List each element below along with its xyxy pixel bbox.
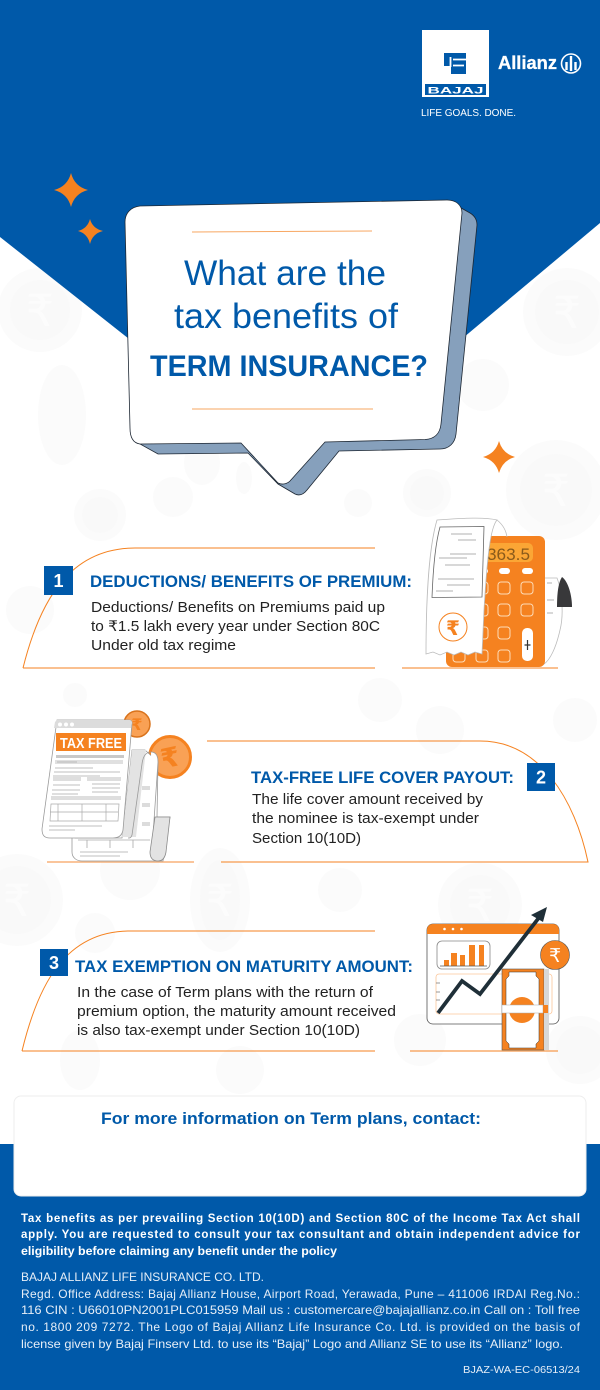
background rupee coin watermarks: ₹ (542, 467, 570, 516)
contact heading: For more information on Term plans, contact: (101, 1109, 481, 1128)
title: TERM INSURANCE? (150, 350, 428, 383)
company legal text: Regd. Office Address: Bajaj Allianz House, Airport Road, Yerawada, Pune – 411006 IRDAI Reg.No.: (21, 1287, 580, 1301)
body text: Under old tax regime (91, 638, 236, 654)
number badge 1: 1 (53, 571, 64, 591)
icon: small sparkle (78, 219, 103, 244)
icon: growth chart with banknote (427, 907, 570, 1050)
title: What are the (184, 254, 386, 293)
background rupee coin watermarks: ₹ (26, 287, 54, 336)
frame line (207, 741, 588, 862)
panel: section 3 tax exemption (22, 907, 570, 1051)
icon: calculator and receipt (426, 518, 572, 667)
body text: In the case of Term plans with the return of (77, 985, 374, 1001)
company legal text (21, 1270, 581, 1351)
body text: to ₹1.5 lakh every year under Section 80C (91, 619, 380, 635)
heading: TAX-FREE LIFE COVER PAYOUT: (251, 768, 514, 787)
number badge 2 (527, 763, 555, 791)
frame line (22, 931, 558, 1051)
tagline: LIFE GOALS. DONE. (421, 108, 516, 119)
company legal text: BAJAJ ALLIANZ LIFE INSURANCE CO. LTD. (21, 1270, 264, 1284)
logo: Bajaj Allianz (421, 30, 580, 119)
document code: BJAZ-WA-EC-06513/24 (463, 1364, 580, 1376)
paper roll (150, 817, 170, 861)
background rupee coin watermarks: ₹ (466, 882, 494, 931)
bubble front (125, 200, 462, 484)
company legal text: license given by Bajaj Finserv Ltd. to use its “Bajaj” Logo and Allianz SE to use its “Allianz” logo. (21, 1337, 563, 1351)
contact card (14, 1096, 586, 1196)
number badge 3: 3 (49, 953, 59, 973)
icon: large sparkle (54, 173, 88, 207)
icon: tax free documents and coins: TAX FREE (60, 735, 122, 752)
disclaimer text: eligibility before claiming any benefit under the policy (21, 1246, 338, 1258)
number badge 1 (44, 566, 73, 595)
heading: DEDUCTIONS/ BENEFITS OF PREMIUM: (90, 572, 412, 591)
icon: Bajaj logo box (422, 30, 489, 97)
icon: Bajaj logo box: BAJAJ (428, 86, 484, 96)
panel: section 2 tax-free payout (42, 711, 588, 862)
icon: sparkle right (483, 441, 515, 473)
body text: Deductions/ Benefits on Premiums paid up (91, 600, 385, 616)
icon: tax free documents and coins: ₹ (158, 741, 183, 775)
top blue banner (0, 0, 600, 395)
icon: tax free documents and coins (42, 711, 190, 861)
bottom divider (192, 408, 373, 410)
bubble shadow (140, 200, 477, 495)
body text: Section 10(10D) (252, 831, 361, 847)
speech bubble panel (125, 200, 477, 495)
icon: growth chart with banknote: ₹ (549, 946, 561, 967)
icon: tax free documents and coins: ₹ (131, 717, 143, 734)
company legal text: no. 1800 209 7272. The Logo of Bajaj Allianz Life Insurance Co. Ltd. is provided on the basis of (21, 1320, 581, 1334)
body text (77, 985, 396, 1039)
panel: section 1 deductions (23, 518, 572, 668)
icon: calculator and receipt: 363.5 (487, 545, 530, 564)
icon: calculator and receipt: ₹ (446, 618, 460, 640)
front document (42, 720, 132, 838)
icon: Allianz roundel (562, 54, 580, 73)
body text (252, 792, 484, 847)
back sheet (72, 750, 170, 861)
title: tax benefits of (174, 297, 398, 336)
number badge 2: 2 (536, 768, 546, 788)
background rupee coin watermarks (0, 268, 600, 1094)
body text: premium option, the maturity amount received (77, 1004, 396, 1020)
frame line (23, 548, 558, 668)
bottom blue band (0, 1144, 600, 1390)
background rupee coin watermarks: ₹ (3, 877, 31, 926)
body text: The life cover amount received by (252, 792, 484, 808)
number badge 3 (40, 949, 68, 976)
company legal text: 116 CIN : U66010PN2001PLC015959 Mail us : customercare@bajajallianz.co.in Call on : Toll free (21, 1303, 580, 1317)
disclaimer text: Tax benefits as per prevailing Section 10(10D) and Section 80C of the Income Tax Act shall (21, 1213, 580, 1225)
Allianz wordmark: Allianz (498, 53, 557, 73)
body text: is also tax-exempt under Section 10(10D) (77, 1023, 360, 1039)
top divider (192, 231, 372, 232)
body text: the nominee is tax-exempt under (252, 811, 479, 827)
background rupee coin watermarks: ₹ (553, 289, 581, 338)
title (150, 254, 428, 383)
heading: TAX EXEMPTION ON MATURITY AMOUNT: (75, 957, 413, 976)
disclaimer text (21, 1213, 581, 1258)
body text (91, 600, 385, 654)
disclaimer text: apply. You are requested to consult your tax consultant and obtain independent advice for (21, 1229, 581, 1241)
background rupee coin watermarks: ₹ (206, 877, 234, 926)
